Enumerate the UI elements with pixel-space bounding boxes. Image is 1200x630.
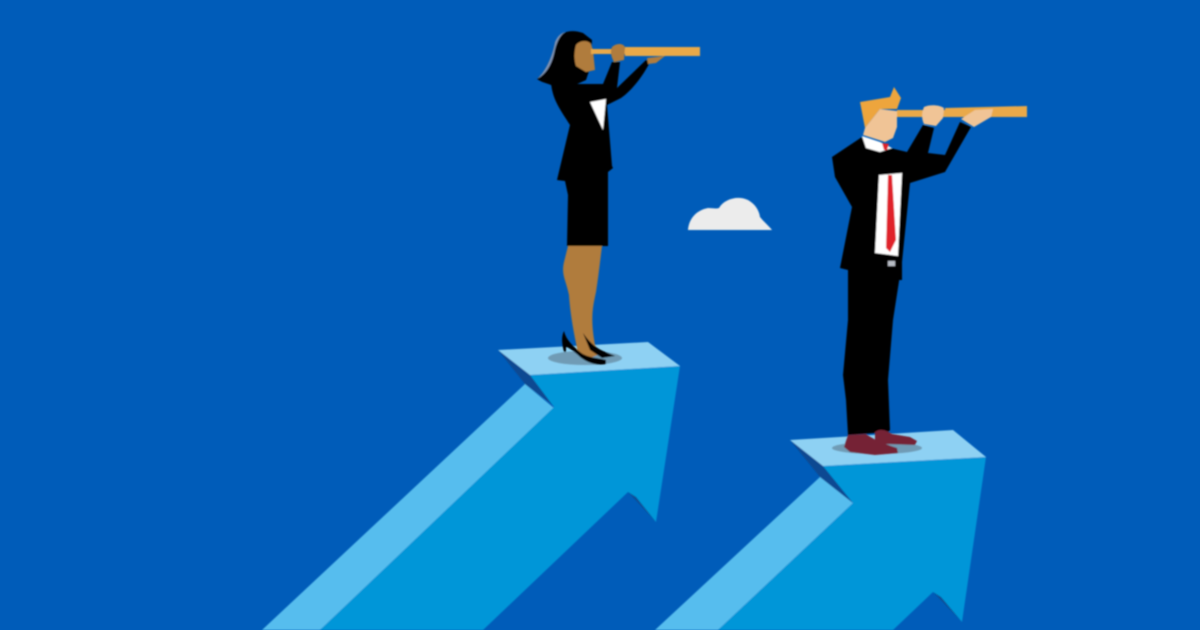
man hands	[922, 105, 993, 127]
woman hands	[611, 44, 665, 64]
woman skirt and jacket	[551, 60, 650, 246]
man shadow	[832, 442, 922, 454]
icon: right rising arrow	[655, 430, 986, 630]
telescope	[591, 47, 700, 56]
man face	[863, 109, 897, 142]
woman hair highlight	[537, 32, 565, 79]
man shoes	[844, 430, 917, 455]
man shirt	[875, 173, 902, 256]
man jacket	[832, 122, 971, 280]
woman shoes	[562, 331, 615, 365]
woman legs	[563, 246, 602, 358]
man hair	[860, 87, 901, 128]
man collar	[862, 136, 892, 152]
man tie	[882, 143, 896, 252]
figure: woman with telescope	[537, 31, 700, 365]
man belt buckle	[888, 261, 895, 266]
woman face	[574, 41, 595, 72]
woman hair	[537, 31, 592, 100]
woman shirt	[590, 99, 606, 130]
man trousers	[843, 262, 902, 435]
figure: man with telescope	[832, 87, 1027, 455]
icon: cloud	[688, 198, 772, 230]
icon: left rising arrow	[262, 342, 680, 630]
man telescope	[897, 106, 1027, 117]
woman shadow	[548, 351, 622, 365]
